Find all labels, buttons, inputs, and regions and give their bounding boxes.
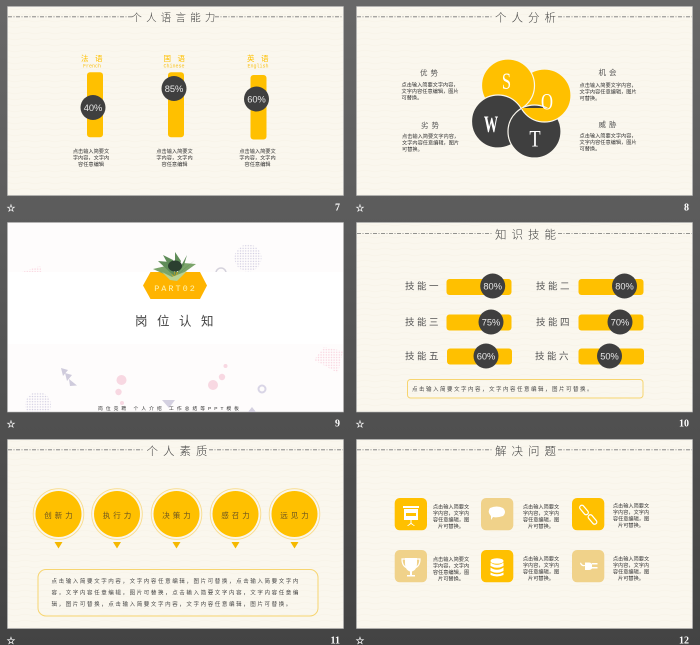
title: 个人分析	[495, 12, 561, 24]
footer: ☆	[356, 204, 364, 214]
item: chain link: 字内容，文字内	[613, 508, 649, 516]
text box: 辑，图片可替换，点击输入简要文字内容，文字内容任意编辑，图片可替换。	[52, 600, 293, 608]
bar: French: 容任意编辑	[78, 160, 104, 168]
quality 3: 决策力	[162, 510, 194, 520]
skill 3	[405, 310, 512, 334]
bar: French: French	[83, 64, 101, 70]
item: database: 点击输入简要文	[523, 554, 560, 562]
skill 3: 75%	[482, 318, 500, 328]
skill 1	[405, 274, 512, 298]
SWOT circles: W	[484, 113, 498, 138]
text: threats: 点击输入简要文字内容，	[580, 132, 637, 140]
item: presentation: 容任意编辑，图	[433, 516, 469, 524]
section heading: 岗位认知	[135, 314, 223, 328]
footer: 9	[335, 418, 340, 430]
footer	[6, 202, 340, 214]
skill 4: 70%	[611, 318, 629, 328]
skill 6: 技能六	[535, 350, 571, 362]
text: weaknesses: 文字内容任意编辑，图片	[402, 138, 459, 146]
text: opportunities: 文字内容任意编辑，图片	[580, 88, 637, 96]
bar: English	[239, 53, 276, 168]
footer	[6, 418, 340, 430]
item: database	[481, 550, 560, 582]
footer	[356, 636, 689, 645]
plant	[153, 252, 196, 281]
bar: French: 点击输入简要文	[73, 147, 110, 155]
skill 4	[536, 310, 644, 334]
footer: 10	[679, 418, 689, 430]
item: speech bubble: 片可替换。	[528, 522, 554, 530]
skill 2: 80%	[615, 282, 634, 292]
footer	[6, 636, 340, 645]
panel: slide 8 SWOT	[356, 6, 692, 214]
item: chain link: 片可替换。	[618, 521, 644, 529]
bar: Chinese: 点击输入简要文	[156, 147, 193, 155]
quality 2: 执行力	[103, 510, 134, 520]
item: database: 片可替换。	[528, 574, 554, 582]
panel: slide 7 language ability	[6, 6, 344, 214]
footer: ☆	[6, 204, 16, 214]
text box: 点击输入简要文字内容，文字内容任意编辑，图片可替换，点击输入简要文字内	[52, 577, 300, 585]
text: threats	[580, 119, 637, 152]
title: 解决问题	[495, 445, 561, 458]
skill 5: 技能五	[405, 350, 441, 362]
text: threats: 文字内容任意编辑，图片	[580, 138, 637, 146]
skill 5	[405, 344, 512, 368]
panel: slide 11 personal qualities	[6, 440, 344, 645]
text: opportunities: 可替换。	[580, 94, 600, 102]
quality 2	[92, 489, 142, 548]
item: trophy	[395, 550, 470, 582]
text: strengths: 点击输入简要文字内容，	[402, 80, 459, 88]
item: plug: 字内容，文字内	[613, 561, 649, 569]
bar: English: English	[247, 64, 269, 70]
item: presentation: 片可替换。	[438, 522, 464, 530]
text: opportunities	[580, 67, 637, 102]
footer	[356, 202, 689, 214]
footer: ☆	[6, 420, 16, 430]
SWOT circles: T	[529, 126, 541, 152]
text: weaknesses: 可替换。	[402, 145, 423, 153]
text: strengths: 可替换。	[402, 94, 422, 102]
quality 3	[151, 489, 202, 548]
bar: French: 40%	[84, 103, 102, 113]
footer	[356, 418, 689, 430]
quality 4: 感召力	[221, 510, 253, 520]
callout: 点击输入简要文字内容，文字内容任意编辑，图片可替换。	[412, 385, 594, 393]
text: opportunities: 点击输入简要文字内容，	[580, 81, 637, 89]
text: strengths	[402, 68, 459, 102]
item: plug: 点击输入简要文	[613, 554, 650, 562]
panel: slide 9 section cover	[6, 222, 344, 430]
SWOT circles: O	[541, 90, 553, 115]
bar: French: 字内容，文字内	[73, 154, 109, 162]
item: presentation: 点击输入简要文	[433, 502, 470, 510]
skill 3: 技能三	[405, 316, 441, 328]
bar: English: 字内容，文字内	[239, 154, 276, 162]
title: 知识技能	[495, 228, 561, 242]
SWOT circles: S	[502, 69, 511, 95]
item: speech bubble: 字内容，文字内	[523, 509, 559, 517]
item: database: 容任意编辑，图	[523, 568, 559, 576]
skill 1: 技能一	[405, 280, 441, 292]
hexagon badge	[143, 272, 207, 299]
decorative shapes	[22, 244, 343, 418]
item: speech bubble: 容任意编辑，图	[523, 516, 559, 524]
bar: French: 法语	[81, 53, 109, 63]
quality 1: 创新力	[44, 510, 76, 520]
text: weaknesses: 点击输入简要文字内容，	[402, 132, 459, 140]
quality 1	[33, 489, 84, 548]
item: presentation	[395, 498, 470, 530]
text: weaknesses: 劣势	[421, 120, 442, 130]
item: plug: 容任意编辑，图	[613, 568, 649, 576]
bar: English: 容任意编辑	[245, 160, 270, 168]
item: speech bubble: 点击输入简要文	[523, 502, 560, 510]
skill 4: 技能四	[536, 316, 572, 328]
SWOT circles	[472, 59, 571, 158]
item: trophy: 字内容，文字内	[433, 562, 469, 570]
text box	[38, 570, 318, 616]
quality 4	[210, 489, 261, 548]
bar: Chinese: 国语	[164, 53, 192, 63]
text: weaknesses	[402, 120, 459, 153]
bar: Chinese: 字内容，文字内	[156, 154, 193, 162]
item: plug: 片可替换。	[618, 574, 644, 582]
footer: 8	[684, 202, 689, 214]
bar: Chinese: Chinese	[163, 64, 185, 70]
item: chain link	[572, 498, 650, 530]
bar: French	[73, 53, 110, 168]
item: trophy: 片可替换。	[438, 574, 464, 582]
text box: 容，文字内容任意编辑，图片可替换，点击输入简要文字内容，文字内容任意编	[52, 589, 300, 597]
text: opportunities: 机会	[598, 67, 620, 77]
quality 5	[269, 489, 320, 548]
white band	[8, 272, 343, 344]
item: chain link: 点击输入简要文	[613, 502, 650, 510]
skill 6	[535, 344, 644, 368]
bar: English: 点击输入简要文	[239, 147, 276, 155]
item: speech bubble	[481, 498, 560, 530]
item: database: 字内容，文字内	[523, 561, 559, 569]
bottom caption: 岗位竞聘 个人介绍 工作总结等PPT模板	[98, 405, 242, 412]
title: 个人素质	[146, 445, 212, 458]
footer: ☆	[356, 420, 364, 430]
bar: English: 60%	[247, 94, 266, 104]
item: plug	[572, 550, 650, 582]
panel: slide 10 skills	[356, 222, 692, 430]
item: presentation: 字内容，文字内	[433, 509, 469, 517]
bar: Chinese: 容任意编辑	[162, 160, 187, 168]
skill 2: 技能二	[536, 280, 572, 292]
panel: slide 12 problem solving	[356, 440, 692, 645]
bar: English: 英语	[247, 53, 275, 63]
callout	[408, 380, 643, 398]
item: trophy: 点击输入简要文	[433, 555, 470, 563]
text: threats: 威胁	[598, 119, 620, 129]
text: strengths: 优势	[420, 68, 441, 78]
text: threats: 可替换。	[580, 144, 600, 152]
skill 2	[536, 274, 644, 298]
item: chain link: 容任意编辑，图	[613, 514, 649, 522]
footer: 7	[335, 202, 340, 214]
text: strengths: 文字内容任意编辑，图片	[402, 87, 459, 95]
skill 6: 50%	[600, 352, 619, 362]
bar: Chinese	[156, 53, 193, 168]
bar: Chinese: 85%	[165, 84, 183, 94]
title: 个人语言能力	[131, 11, 220, 24]
skill 5: 60%	[477, 352, 495, 362]
hexagon badge: PART02	[154, 284, 197, 294]
skill 1: 80%	[483, 282, 502, 292]
item: trophy: 容任意编辑，图	[433, 568, 469, 576]
quality 5: 远见力	[280, 510, 312, 520]
